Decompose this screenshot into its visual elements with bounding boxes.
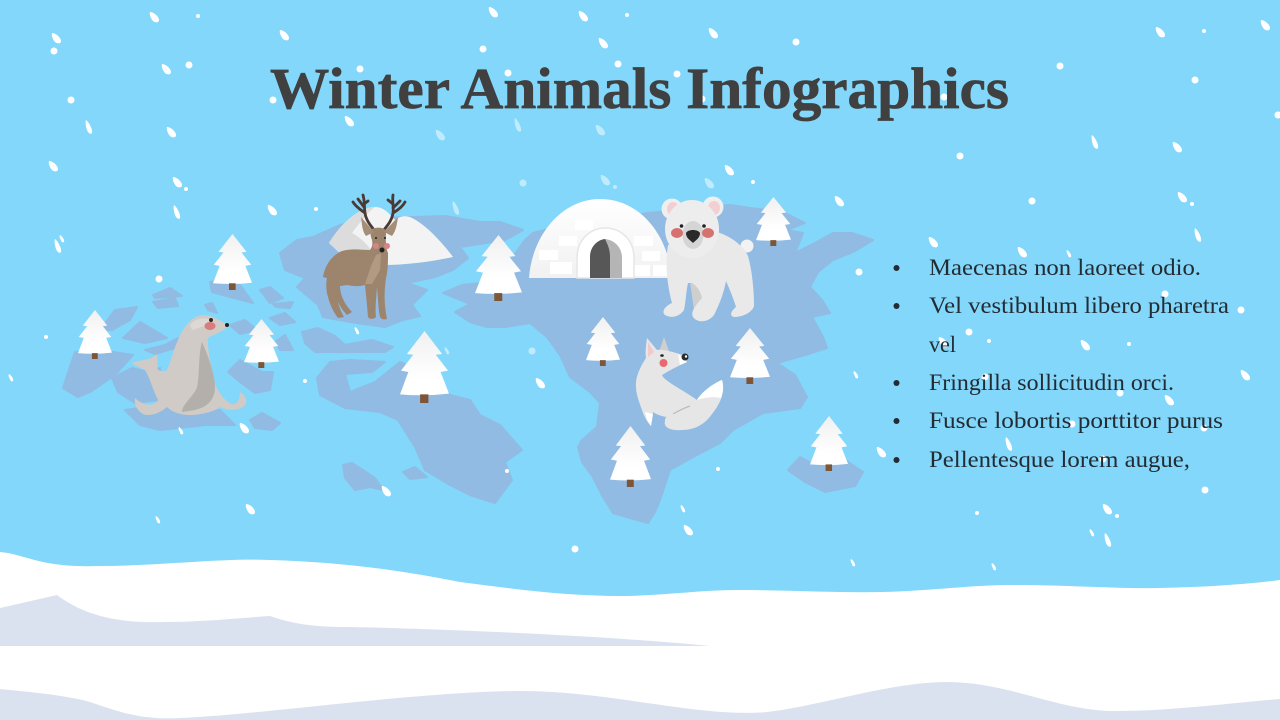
icon: seal [132,315,246,415]
fox far ear [659,337,669,352]
igloo dome [529,199,672,278]
bear nose [686,230,700,243]
bear cheeks [671,228,683,238]
bear muzzle [682,221,704,249]
seal head highlight [190,318,215,330]
tree 7 [756,197,791,246]
icon: deer [323,195,405,319]
map: far west islands [63,350,133,397]
deer face [373,237,390,252]
distant snow mountains [0,595,710,646]
fox nose [682,354,688,360]
title: Winter Animals Infographics [270,56,1009,121]
snowy mountain [329,207,453,265]
tree 9 [610,426,651,487]
tree 10 [810,416,848,471]
tree 8 [730,328,770,384]
map: Greenland and northern landmass [443,205,873,523]
bullet 2: Vel vestibulum libero pharetra [929,293,1230,319]
bullet 1: Maecenas non laoreet odio. [929,255,1201,281]
bullet 2: vel [929,332,956,358]
fox body [636,338,723,430]
bullet 5: Pellentesque lorem augue, [929,447,1190,473]
map: southern islands [343,463,383,490]
bullet 3: Fringilla sollicitudin orci. [929,370,1174,396]
deer body [323,228,388,319]
fox eye [660,354,664,357]
seal face [204,318,229,330]
tree 5 [475,235,522,301]
map: Iceland [788,457,863,492]
map: middle islands [302,328,393,352]
icon: arctic fox [636,337,723,430]
map: island cluster under deer [280,216,523,327]
tree 4 [400,331,449,403]
seal belly [182,342,215,412]
fox paw tip [645,412,653,426]
bullet 4: Fusce lobortis porttitor purus [929,408,1223,434]
fox fur line [673,406,690,414]
bear head [665,200,719,258]
bear eyes [680,224,683,228]
seal body [132,315,246,415]
fox cheek [660,359,668,367]
bullet list [894,255,1230,473]
fox tail tip [697,380,723,400]
deer chest [365,253,381,284]
map: large bay landmass [317,360,522,503]
icon: polar bear [662,196,754,321]
falling snowflakes [9,7,1280,570]
snow drift [0,552,1280,720]
world map silhouette [63,205,873,523]
tree 6 [586,317,620,366]
bear tail [740,240,754,252]
igloo bricks [539,220,667,276]
icons: snowy pine trees [78,197,848,487]
icon: igloo [529,199,672,278]
foreground snow shadow [0,682,1280,720]
bear body [663,232,754,321]
bear ears [662,198,682,220]
tree 1 [213,234,252,290]
fox snout [678,354,687,365]
bullet 2 [894,293,1230,358]
tree 3 [244,319,279,368]
deer ears [361,217,398,236]
igloo doorway [590,239,622,278]
bear back leg [690,282,703,310]
snow ground [0,552,1280,720]
fox inner ear [648,342,654,357]
igloo door arch [577,228,634,278]
tree 2 [78,310,112,359]
deer antlers [353,195,405,231]
